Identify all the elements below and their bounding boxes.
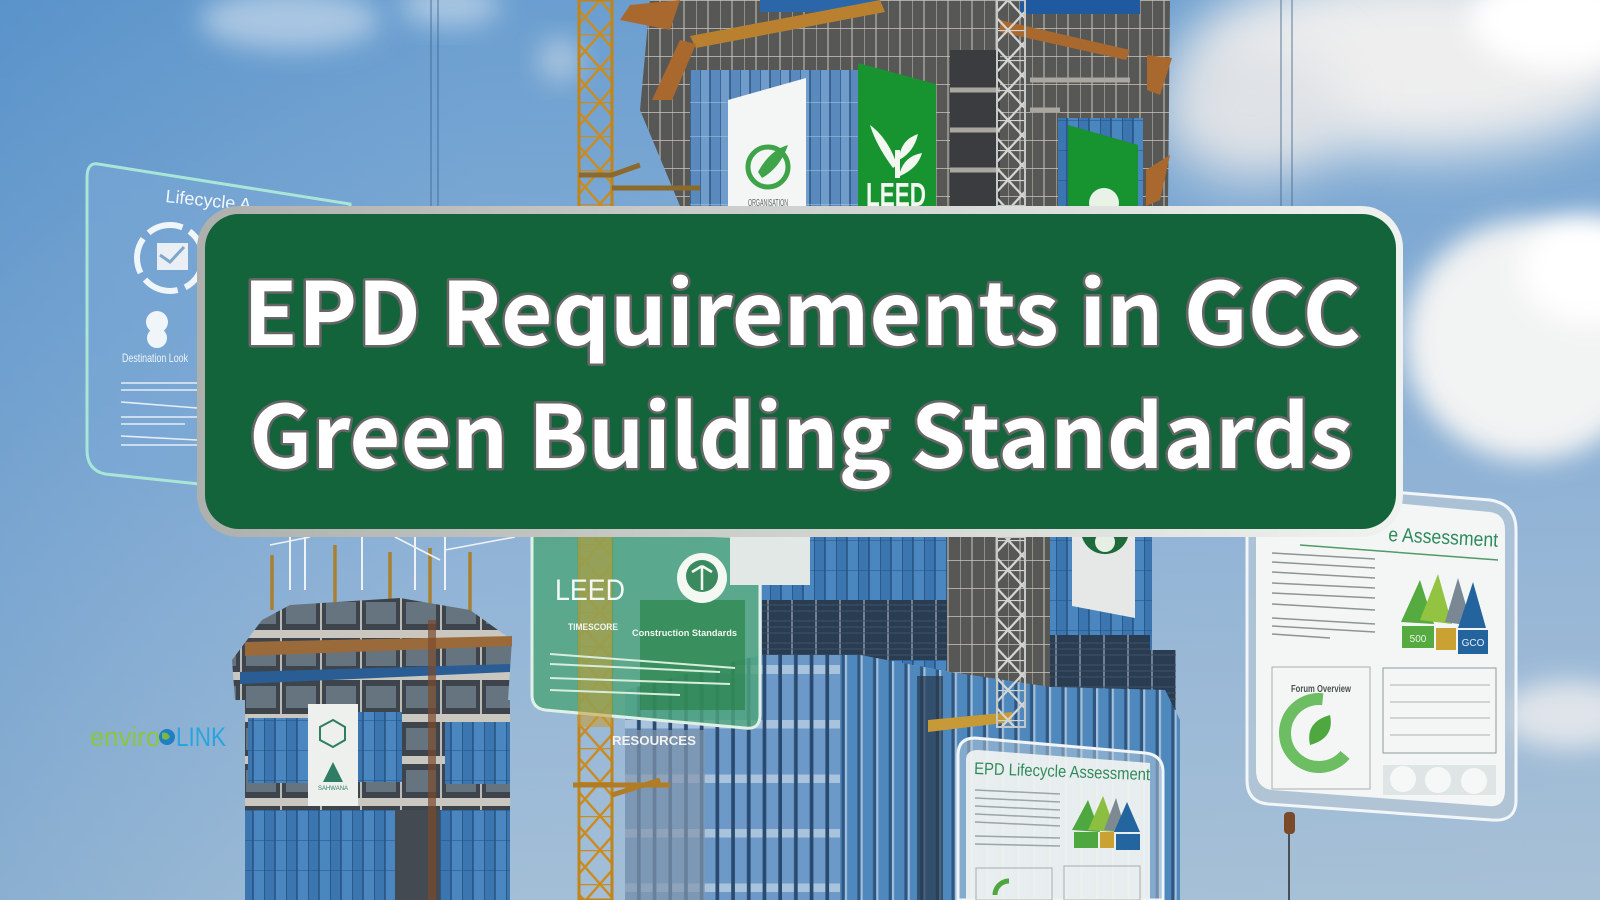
card: Lifecycle Assessment (left, glass): Lifecycle A bbox=[165, 186, 252, 215]
left tower banner: SAHWANA bbox=[318, 786, 348, 792]
card: Lifecycle Assessment (right): GCO bbox=[1462, 638, 1485, 649]
banner: white with green emblem: ORGANISATION bbox=[748, 198, 788, 209]
card: LEED (centre, green glass): LEED bbox=[555, 574, 625, 607]
card: Lifecycle Assessment (right): e Assessment bbox=[1388, 524, 1499, 552]
banner: lower white with emblem bbox=[1072, 532, 1135, 618]
card: Lifecycle Assessment (right) bbox=[1247, 480, 1516, 820]
banner: green right bbox=[1068, 125, 1138, 218]
card: LEED (centre, green glass): Construction Standards bbox=[632, 628, 737, 638]
logo: enviroLINK: enviro bbox=[90, 722, 160, 752]
crane hook bbox=[1284, 812, 1295, 900]
card: EPD Lifecycle Assessment (bottom) bbox=[958, 738, 1163, 900]
title text bbox=[243, 245, 1361, 494]
title text: Green Building Standards bbox=[249, 368, 1353, 494]
logo: enviroLINK bbox=[90, 722, 226, 752]
banner: white with green emblem bbox=[728, 78, 806, 209]
main tower: upper section bbox=[620, 0, 1172, 206]
card: Lifecycle Assessment (right): 500 bbox=[1410, 634, 1427, 645]
left tower under construction bbox=[232, 537, 515, 900]
card: EPD Lifecycle Assessment (bottom): EPD Lifecycle Assessment bbox=[974, 759, 1151, 784]
logo: enviroLINK: LINK bbox=[176, 722, 226, 752]
card: Lifecycle Assessment (right): Forum Overview bbox=[1291, 684, 1351, 695]
left tower banner bbox=[308, 704, 358, 806]
card: Lifecycle Assessment (left, glass) bbox=[87, 164, 350, 500]
banner: LEED green: LEED bbox=[866, 176, 926, 213]
card: LEED (centre, green glass): RESOURCES bbox=[612, 733, 696, 748]
main tower: lower section bbox=[625, 537, 1180, 900]
title text: EPD Requirements in GCC bbox=[243, 245, 1361, 371]
scaffold hoist: upper bbox=[997, 0, 1025, 206]
scaffold hoist: lower bbox=[997, 537, 1025, 727]
yellow tower crane bbox=[573, 0, 700, 900]
card: LEED (centre, green glass): TIMESCORE bbox=[568, 622, 618, 632]
title panel bbox=[197, 206, 1403, 537]
card: LEED (centre, green glass) bbox=[532, 530, 810, 748]
clouds bbox=[200, 0, 1600, 749]
hanging cables bbox=[431, 0, 1292, 210]
banner: LEED green bbox=[858, 63, 936, 213]
card: Lifecycle Assessment (left, glass): Destination Look bbox=[122, 351, 189, 365]
